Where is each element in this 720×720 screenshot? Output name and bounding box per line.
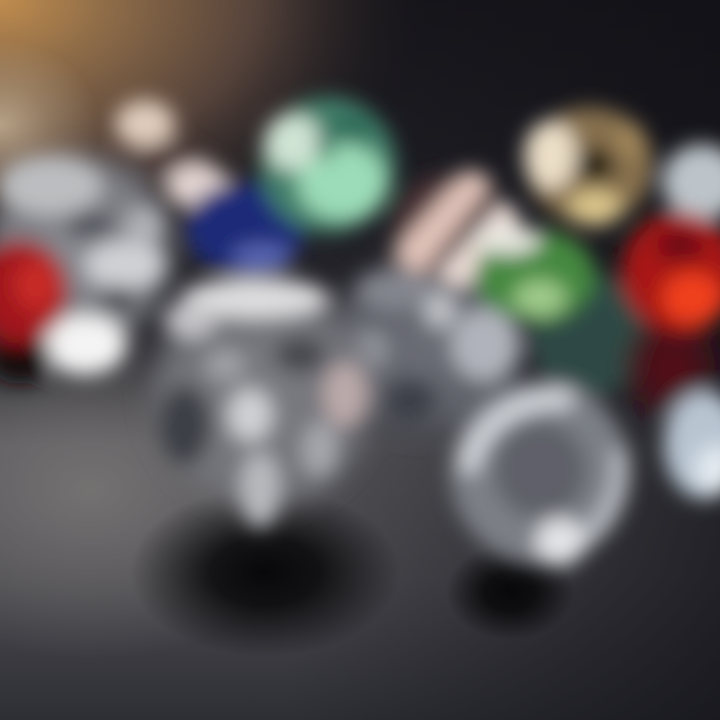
- gem: red right: [622, 212, 720, 332]
- gem: gold ring stone: [524, 107, 654, 226]
- gem: striped pink and white: [390, 168, 522, 288]
- floor shadow: right: [446, 544, 574, 640]
- gemstones group: [0, 97, 720, 566]
- gem: clear sphere lower right: [450, 380, 630, 566]
- gem: pale blue right: [664, 391, 720, 499]
- gem: blue sapphire: [185, 182, 305, 274]
- floor shadow: large central: [130, 487, 400, 657]
- gem: bright green: [475, 226, 595, 321]
- gem: clear cluster left: [0, 142, 185, 375]
- gem: dark red lower right: [616, 306, 720, 430]
- gem: dark green: [530, 273, 650, 397]
- gem: mid clear: [313, 245, 537, 445]
- gem: red left: [0, 240, 68, 384]
- gem: green sphere: [260, 97, 396, 233]
- gem: clear top right: [662, 144, 720, 220]
- gem: pink-white top left: [115, 100, 230, 208]
- gem: large clear center: [137, 270, 387, 528]
